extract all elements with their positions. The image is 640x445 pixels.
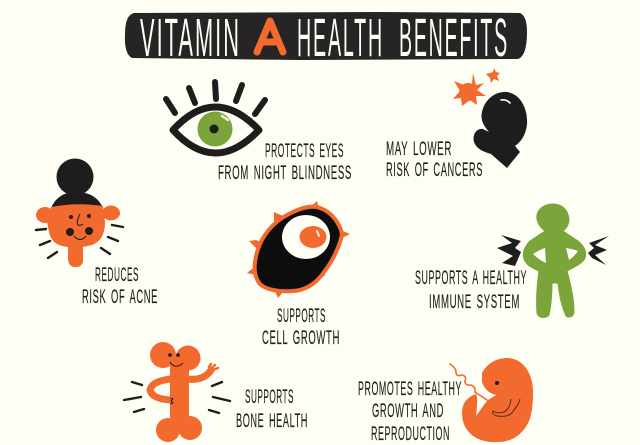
icon: cell xyxy=(247,201,350,298)
infographic canvas: RISK OF CANCERS xyxy=(386,160,483,181)
title banner: VITAMIN xyxy=(140,8,241,68)
infographic canvas: BONE HEALTH xyxy=(236,411,308,432)
text: promotes healthy growth and reproduction: REPRODUCTION xyxy=(371,424,450,445)
text: reduces risk of acne: REDUCES xyxy=(95,265,139,286)
icon: eye xyxy=(166,82,265,153)
text: supports cell growth: SUPPORTS xyxy=(277,306,326,327)
text: may lower risk of cancers: MAY LOWER xyxy=(386,139,452,160)
icon: boxing glove and stars xyxy=(453,68,527,168)
text: supports a healthy immune system xyxy=(415,268,527,313)
text: reduces risk of acne xyxy=(82,265,158,308)
icon: embryo xyxy=(450,358,533,442)
text: promotes healthy growth and reproduction xyxy=(358,379,462,445)
text: protects eyes xyxy=(218,141,352,184)
text: supports bone health: SUPPORTS xyxy=(245,387,294,408)
icon: bone character xyxy=(124,342,230,442)
infographic canvas: PROMOTES HEALTHY xyxy=(358,379,462,400)
text: promotes healthy growth and reproduction: GROWTH AND xyxy=(372,401,444,422)
text: supports cell growth xyxy=(262,306,340,349)
icon: face with acne xyxy=(36,158,123,267)
title banner xyxy=(125,8,527,68)
text: supports bone health xyxy=(236,387,308,432)
text: protects eyes: FROM NIGHT BLINDNESS xyxy=(218,163,352,184)
infographic canvas: PROTECTS EYES xyxy=(265,141,344,162)
title banner: HEALTH xyxy=(297,8,384,68)
icon: immune figure xyxy=(497,204,609,317)
text: supports cell growth: CELL GROWTH xyxy=(262,328,340,349)
infographic canvas: RISK OF ACNE xyxy=(82,287,158,308)
text: may lower risk of cancers xyxy=(386,139,483,181)
text: supports a healthy immune system: IMMUNE SYSTEM xyxy=(429,292,520,313)
